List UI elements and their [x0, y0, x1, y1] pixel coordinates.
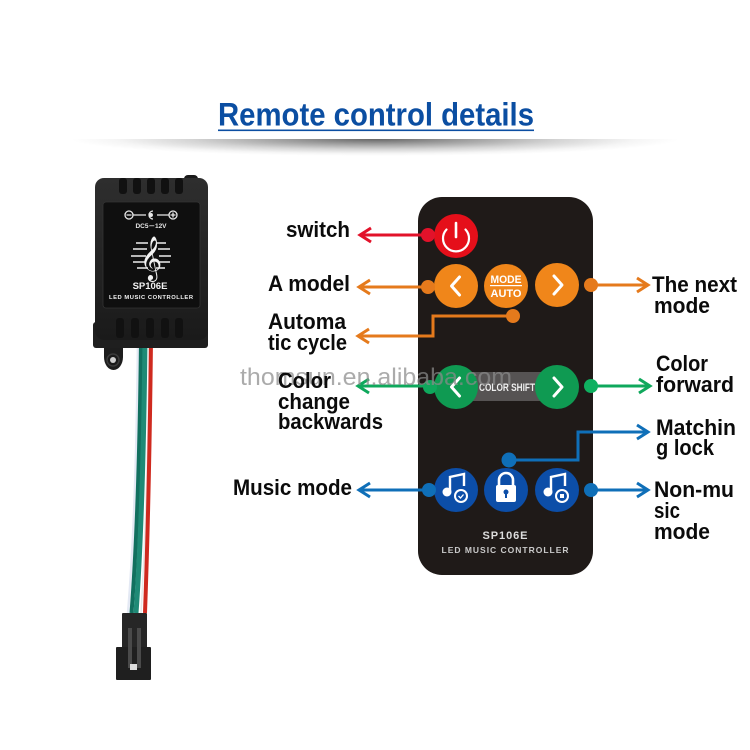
- panel: remote control: [418, 197, 593, 575]
- device wires: [128, 340, 151, 613]
- button: mode auto: [484, 264, 528, 308]
- label: non-music mode: [654, 477, 734, 544]
- label: automatic cycle: Automa: [268, 309, 347, 334]
- label: color forward: forward: [656, 372, 734, 397]
- arrow: matching lock: [502, 425, 648, 468]
- label: the next mode: [652, 272, 738, 318]
- arrow: a model: [359, 280, 435, 294]
- title: Remote control details: [218, 96, 534, 132]
- button: color forward: [535, 365, 579, 409]
- device: LED music controller: [93, 175, 208, 680]
- label: color change backwards: [278, 368, 383, 434]
- label: color forward: [656, 351, 734, 397]
- color shift bar: [470, 372, 545, 401]
- device polarity diagram: [125, 211, 177, 219]
- arrow: color forward: [584, 379, 650, 393]
- label: music mode: Music mode: [233, 475, 352, 500]
- label: non-music mode: sic: [654, 498, 680, 523]
- label: switch: switch: [286, 217, 350, 242]
- arrow: switch: [360, 228, 435, 242]
- label: non-music mode: Non-mu: [654, 477, 734, 502]
- arrow: next mode: [584, 278, 648, 292]
- label: non-music mode: mode: [654, 519, 710, 544]
- label: the next mode: The next: [652, 272, 738, 297]
- button: lock: [484, 468, 528, 512]
- label: color forward: Color: [656, 351, 708, 376]
- button: next mode: [535, 263, 579, 307]
- label: a model: A model: [268, 271, 350, 296]
- watermark: thomsun.en.alibaba.com: [240, 364, 512, 391]
- icon: treble clef staff: [131, 236, 171, 282]
- remote model name: SP106E: [482, 530, 528, 542]
- remote caption: LED MUSIC CONTROLLER: [442, 545, 568, 555]
- button: mode auto: MODE: [490, 274, 522, 286]
- arrow: automatic cycle: [358, 309, 520, 343]
- device caption: LED MUSIC CONTROLLER: [109, 295, 194, 301]
- label: automatic cycle: tic cycle: [268, 330, 347, 355]
- icon: treble clef staff: 𝄞: [140, 236, 162, 282]
- connector plug: [116, 613, 151, 680]
- device model name: SP106E: [133, 281, 167, 292]
- color shift bar: COLOR SHIFT: [479, 382, 535, 394]
- button: non-music mode: [535, 468, 579, 512]
- label: automatic cycle: [268, 309, 347, 355]
- button: power: [434, 214, 478, 258]
- arrow: music mode: [359, 483, 436, 497]
- label: the next mode: mode: [654, 293, 710, 318]
- label: matching lock: Matchin: [656, 415, 736, 440]
- label: color change backwards: Color: [278, 368, 331, 393]
- button: music mode: [434, 468, 478, 512]
- arrow: color backward: [358, 379, 437, 394]
- label: color change backwards: backwards: [278, 409, 383, 434]
- header shadow band: [70, 139, 680, 173]
- button: color backward: [434, 365, 478, 409]
- device voltage label: DC5－12V: [135, 223, 167, 230]
- device body: [93, 175, 208, 370]
- label: matching lock: g lock: [656, 435, 715, 460]
- arrow: non-music mode: [584, 483, 648, 497]
- button: mode auto: AUTO: [490, 288, 522, 300]
- label: color change backwards: change: [278, 389, 350, 414]
- button: previous mode: [434, 264, 478, 308]
- label: matching lock: [656, 415, 736, 460]
